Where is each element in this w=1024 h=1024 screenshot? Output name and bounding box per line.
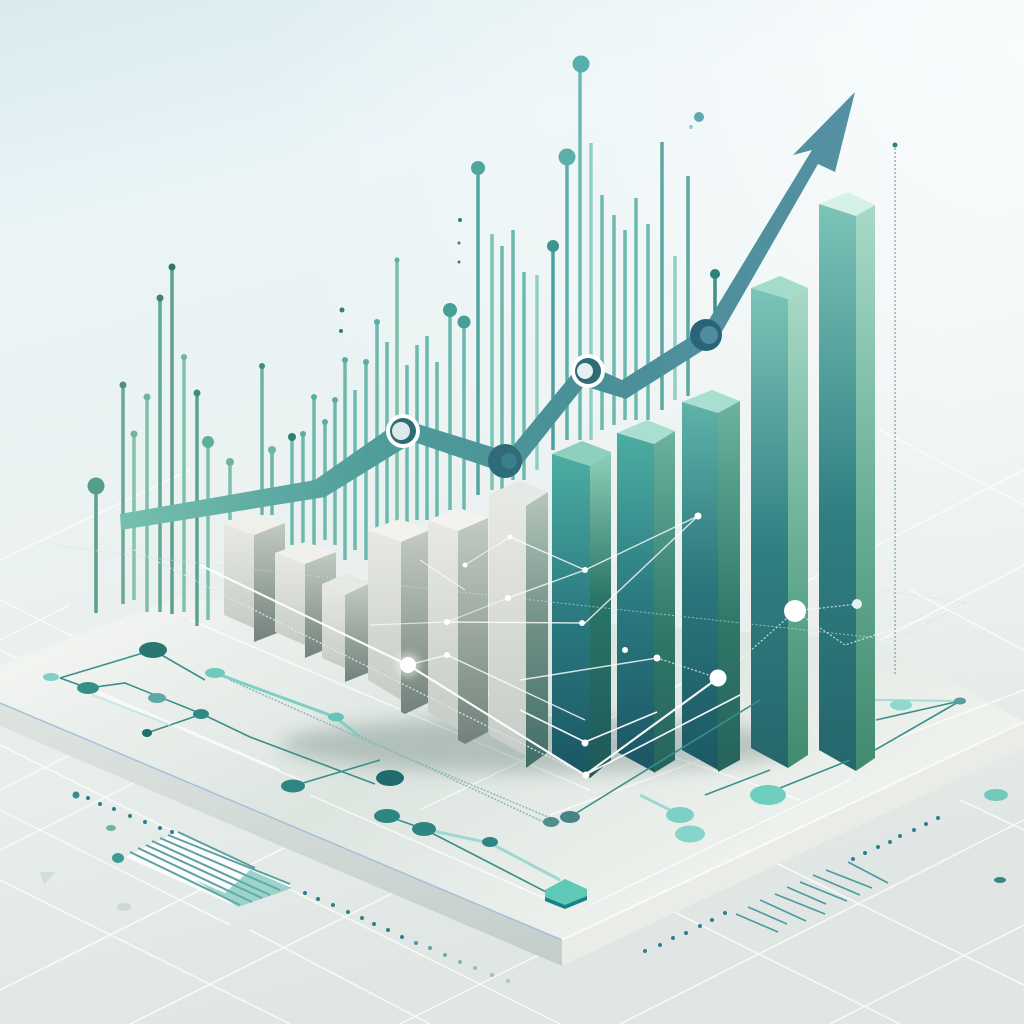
- node 3: [571, 354, 605, 388]
- bar shadows: [280, 717, 800, 773]
- floor striped panel: [112, 832, 292, 907]
- floor tick marks: [736, 862, 888, 932]
- node 1: [386, 414, 420, 448]
- white overlay line chart: [52, 516, 965, 775]
- node 2: [488, 444, 522, 478]
- node 4: [690, 319, 722, 351]
- floor grid: [0, 430, 1024, 1024]
- bar 7: [552, 441, 611, 778]
- network nodes: [43, 642, 966, 847]
- bar 3: [322, 573, 370, 682]
- dotted guide line right: [894, 148, 896, 675]
- teal marker block: [545, 879, 587, 909]
- bar 6: [489, 481, 548, 768]
- rising trend arrow: [120, 92, 855, 530]
- platform: [0, 598, 1024, 966]
- platform network diagram: [43, 642, 966, 909]
- floor nodes: [40, 789, 1008, 911]
- bar 11: [819, 192, 875, 771]
- bar 5: [428, 508, 488, 744]
- bar 2: [275, 542, 336, 658]
- bar 9: [682, 390, 740, 772]
- bar 8: [617, 420, 675, 773]
- bar 4: [368, 519, 430, 714]
- vertical stem chart: [88, 56, 898, 626]
- glowing white data points: [396, 512, 862, 778]
- bars: [224, 192, 875, 778]
- bar 1: [224, 513, 285, 642]
- floor dotted rows: [72, 792, 940, 983]
- bar 10: [751, 276, 808, 768]
